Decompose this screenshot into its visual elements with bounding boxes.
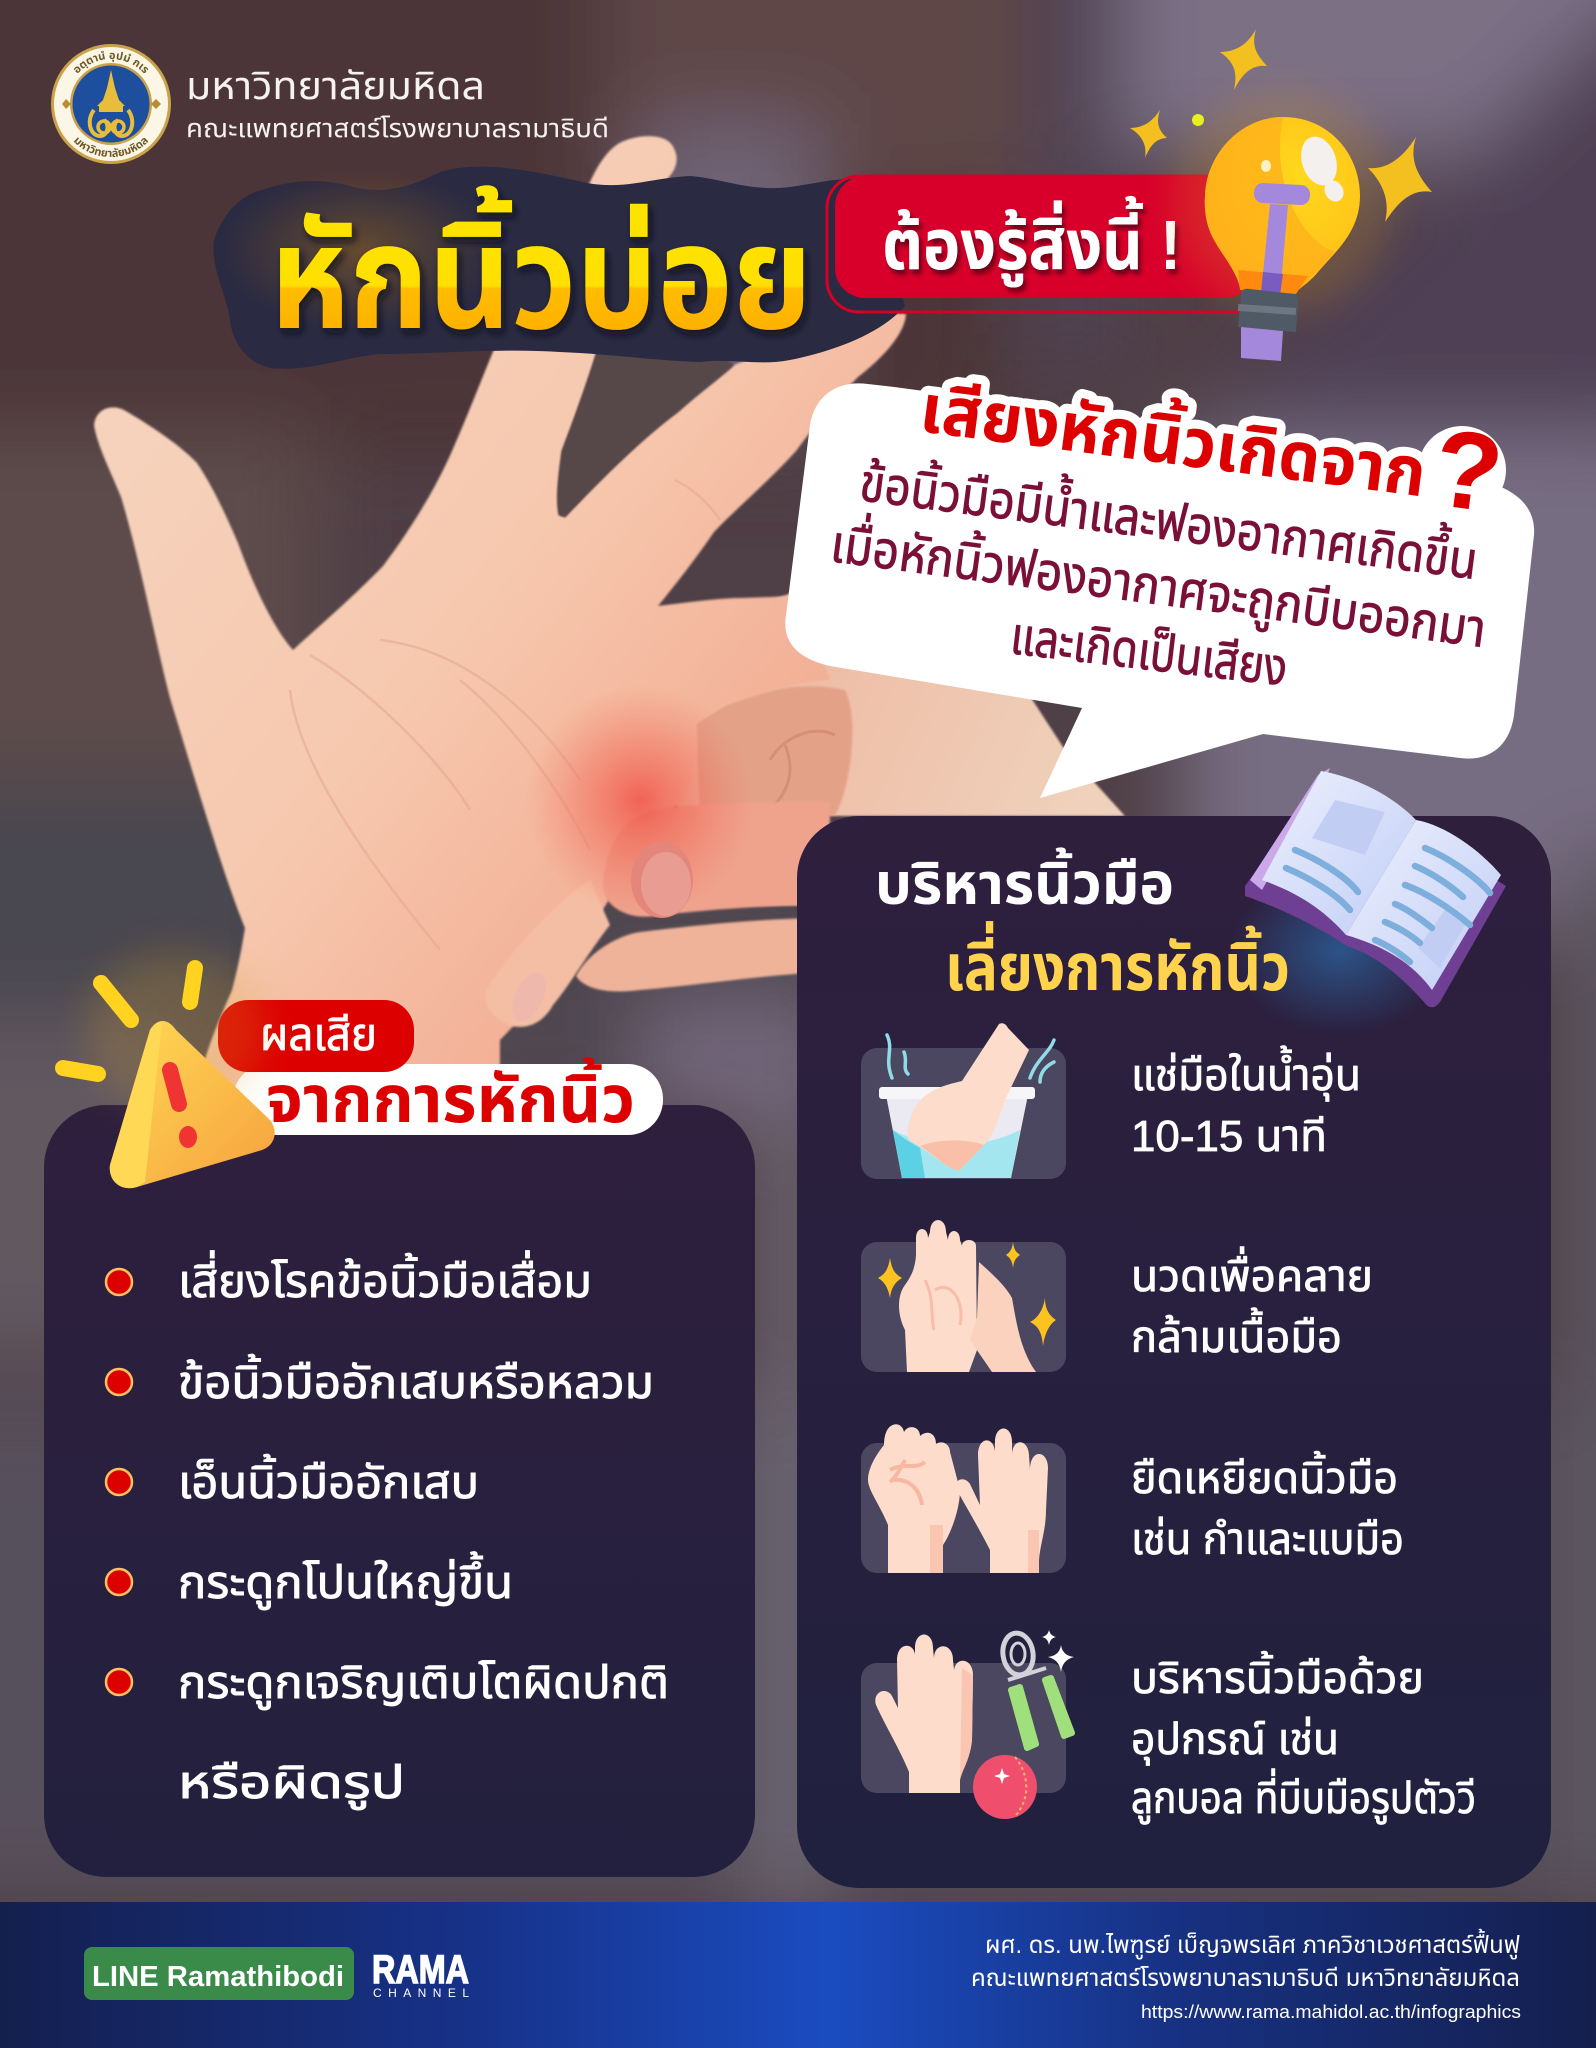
footer credits: ผศ. ดร. นพ.ไพฑูรย์ เบ็ญจพรเลิศ ภาควิชาเวชศาสตร์ฟื้นฟู <box>985 1928 1520 1960</box>
fist <box>868 1424 960 1573</box>
footer credits: https://www.rama.mahidol.ac.th/infographics <box>1141 2002 1521 2022</box>
gap between index and middle finger <box>558 340 734 517</box>
red glow <box>525 685 755 915</box>
header: university name <box>186 66 609 143</box>
icon: open book <box>1245 768 1506 1007</box>
item 2 text <box>1131 1246 1373 1362</box>
banner: ต้องรู้สิ่งนี้ <box>827 176 1267 312</box>
list of effects: กระดูกเจริญเติบโตผิดปกติ <box>178 1656 669 1710</box>
pulled finger with nail <box>603 802 830 917</box>
footer credits: คณะแพทยศาสตร์โรงพยาบาลรามาธิบดี มหาวิทยาลัยมหิดล <box>971 1965 1520 1992</box>
heading: ผลเสีย จากการหักนิ้ว: จากการหักนิ้ว <box>266 1057 635 1136</box>
list of effects: เอ็นนิ้วมืออักเสบ <box>178 1454 479 1508</box>
panel heading: บริหารนิ้วมือ <box>875 846 1174 917</box>
item 2 text: นวดเพื่อคลาย <box>1131 1246 1373 1301</box>
panel: right, finger exercises <box>797 816 1551 1888</box>
item 1 text: แช่มือในน้ำอุ่น <box>1131 1045 1361 1102</box>
panel: right, finger exercises: เลี่ยงการหักนิ้ว <box>945 921 1290 1004</box>
item 4 text <box>1131 1651 1476 1825</box>
icon: light bulb <box>1173 90 1393 361</box>
header logo: Mahidol University seal: อตฺตานํ อุปมํ กเร <box>74 50 148 73</box>
LINE Ramathibodi button: LINE Ramathibodi <box>92 1961 344 1993</box>
main hand <box>94 136 906 1140</box>
bubble heading: เสียงหักนิ้วเกิดจาก <box>916 365 1431 511</box>
title blob <box>213 167 905 369</box>
bubble body: เมื่อหักนิ้วฟองอากาศจะถูกบีบออกมา <box>827 508 1490 661</box>
ball <box>973 1755 1037 1819</box>
footer band <box>0 1902 1596 2048</box>
footer credits <box>971 1928 1521 2022</box>
white sparkles <box>1048 1645 1074 1672</box>
icon: hand in warm water <box>861 1023 1066 1179</box>
palm creases <box>290 480 720 950</box>
open hand <box>956 1428 1048 1573</box>
bubble body <box>827 447 1490 698</box>
item 3 text: เช่น กำและแบมือ <box>1131 1515 1404 1564</box>
question mark: ? <box>1427 406 1509 536</box>
photo: hands with red sore finger <box>94 136 1125 1140</box>
bubble body: และเกิดเป็นเสียง <box>1008 607 1290 698</box>
header: university name: มหาวิทยาลัยมหิดล <box>186 66 485 108</box>
panel: left, harm effects <box>44 1105 755 1877</box>
RAMA channel logo: CHANNEL <box>373 1986 469 2000</box>
list of effects: เสี่ยงโรคข้อนิ้วมือเสื่อม <box>178 1250 592 1307</box>
icon: massaging hands <box>861 1220 1066 1372</box>
header logo: Mahidol University seal: มหาวิทยาลัยมหิดล <box>74 137 148 157</box>
list of effects: กระดูกโปนใหญ่ขึ้น <box>178 1551 513 1610</box>
bubble body: ข้อนิ้วมือมีน้ำและฟองอากาศเกิดขึ้น <box>856 447 1482 591</box>
heading: ผลเสีย จากการหักนิ้ว <box>218 1000 663 1136</box>
hand <box>875 1634 973 1793</box>
gripper <box>1000 1631 1046 1680</box>
banner: ต้องรู้สิ่งนี้: ต้องรู้สิ่งนี้ ! <box>882 196 1181 287</box>
item 4 text: ลูกบอล ที่บีบมือรูปตัววี <box>1131 1768 1476 1825</box>
lower pulling finger <box>576 918 830 991</box>
icon: hand, hand gripper and ball <box>861 1630 1074 1819</box>
list of effects: ข้อนิ้วมืออักเสบหรือหลวม <box>178 1354 654 1408</box>
item 3 text <box>1131 1451 1404 1564</box>
nail lower <box>505 968 553 1026</box>
speech bubble <box>785 365 1534 798</box>
item 3 text: ยืดเหยียดนิ้วมือ <box>1131 1451 1398 1503</box>
sparkles around bulb <box>1130 29 1432 222</box>
list of effects <box>178 1250 669 1810</box>
item 4 text: บริหารนิ้วมือด้วย <box>1131 1651 1424 1703</box>
heading: ผลเสีย จากการหักนิ้ว: ผลเสีย <box>260 1008 377 1060</box>
icon: warning triangle <box>63 950 275 1188</box>
icon: fist and open hand <box>861 1424 1066 1573</box>
title: หักนิ้วบ่อย: หักนิ้วบ่อย <box>270 185 812 359</box>
seal emblem <box>90 70 132 136</box>
RAMA channel logo: RAMA <box>372 1948 469 1992</box>
bullets <box>106 1269 132 1695</box>
header: university name: คณะแพทยศาสตร์โรงพยาบาลรามาธิบดี <box>186 113 609 143</box>
speech bubble: เสียงหักนิ้วเกิดจาก <box>916 365 1431 511</box>
other hand behind <box>660 590 1125 905</box>
item 1 text: 10-15 นาที <box>1131 1112 1327 1161</box>
item 4 text: อุปกรณ์ เช่น <box>1131 1715 1339 1766</box>
curled fist shadow <box>696 686 852 815</box>
list of effects: หรือผิดรูป <box>178 1756 405 1810</box>
header logo: Mahidol University seal <box>51 44 171 164</box>
nail upper <box>631 842 693 918</box>
bent finger with nail <box>485 880 610 1027</box>
item 2 text: กล้ามเนื้อมือ <box>1131 1307 1342 1362</box>
item 1 text <box>1131 1045 1361 1161</box>
LINE Ramathibodi button <box>84 1947 354 2000</box>
